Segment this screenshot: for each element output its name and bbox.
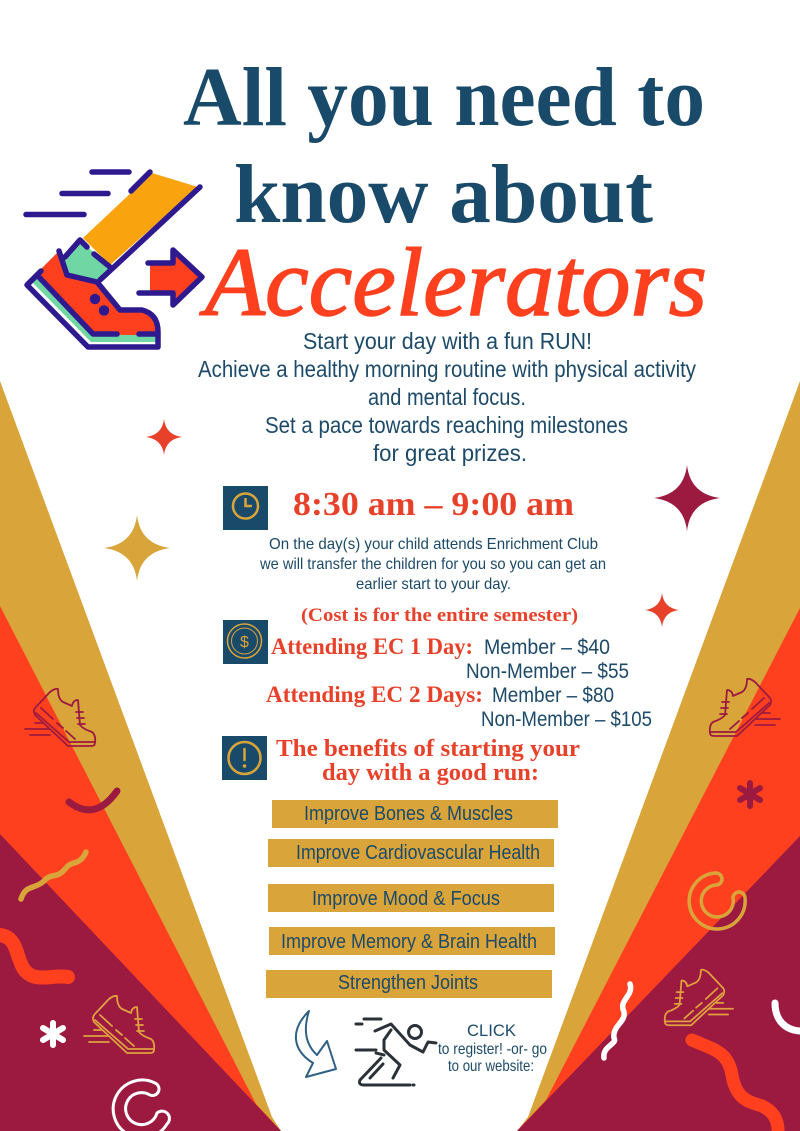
icon: curved arrow (296, 1011, 336, 1077)
icon: clock (223, 486, 268, 530)
benefit bar: cardiovascular: Improve Cardiovascular Health (296, 842, 540, 864)
right background rays (517, 381, 800, 1131)
title (183, 51, 707, 337)
transfer note: On the day(s) your child attends Enrichment Club (269, 536, 598, 553)
benefit bar: memory: Improve Memory & Brain Health (281, 931, 537, 953)
left decorations (0, 689, 169, 1131)
title: All you need to (183, 51, 705, 144)
benefit bar: joints (266, 970, 552, 998)
icon: exclamation (222, 736, 267, 780)
title: Accelerators (199, 229, 707, 337)
benefits heading (276, 736, 580, 786)
icon: running leg and shoe with arrow (26, 172, 202, 347)
left background rays (0, 381, 281, 1131)
intro text: Set a pace towards reaching milestones (265, 412, 628, 438)
pricing (266, 634, 652, 731)
intro text: and mental focus. (368, 384, 526, 410)
icon: dollar coin (223, 620, 268, 664)
icon: dollar coin: $ (240, 634, 249, 651)
intro text: Start your day with a fun RUN! (303, 328, 592, 354)
benefit bar: cardiovascular (268, 839, 554, 867)
call to action text: to register! -or- go (438, 1041, 547, 1058)
pricing: Member – $40 (484, 636, 610, 659)
call to action text: to our website: (448, 1058, 534, 1075)
icon: sprinter (356, 1019, 436, 1085)
transfer note: we will transfer the children for you so you can get an (259, 556, 606, 573)
benefits heading: The benefits of starting your (276, 736, 580, 762)
cost note: (Cost is for the entire semester) (301, 605, 578, 626)
benefit bar: joints: Strengthen Joints (338, 972, 478, 994)
sparkle stars (104, 419, 720, 627)
pricing: Non-Member – $55 (466, 660, 629, 683)
benefit bar: mood (268, 884, 554, 912)
pricing: Non-Member – $105 (481, 708, 652, 731)
benefit bar: mood: Improve Mood & Focus (312, 888, 500, 910)
title: know about (234, 148, 653, 241)
intro text: for great prizes. (373, 440, 527, 466)
benefit bar: bones: Improve Bones & Muscles (304, 803, 513, 825)
transfer note: earlier start to your day. (356, 576, 511, 593)
time heading: 8:30 am – 9:00 am (293, 486, 574, 523)
pricing: Attending EC 2 Days: (266, 682, 483, 707)
right decorations (604, 679, 800, 1131)
call to action text: CLICK (467, 1021, 517, 1040)
intro text (198, 328, 696, 466)
benefit bar: bones (272, 800, 558, 828)
pricing: Attending EC 1 Day: (271, 634, 473, 659)
benefits heading: day with a good run: (322, 760, 539, 786)
call to action text (438, 1021, 547, 1075)
transfer note (259, 536, 606, 593)
intro text: Achieve a healthy morning routine with physical activity (198, 356, 696, 382)
pricing: Member – $80 (492, 684, 614, 707)
